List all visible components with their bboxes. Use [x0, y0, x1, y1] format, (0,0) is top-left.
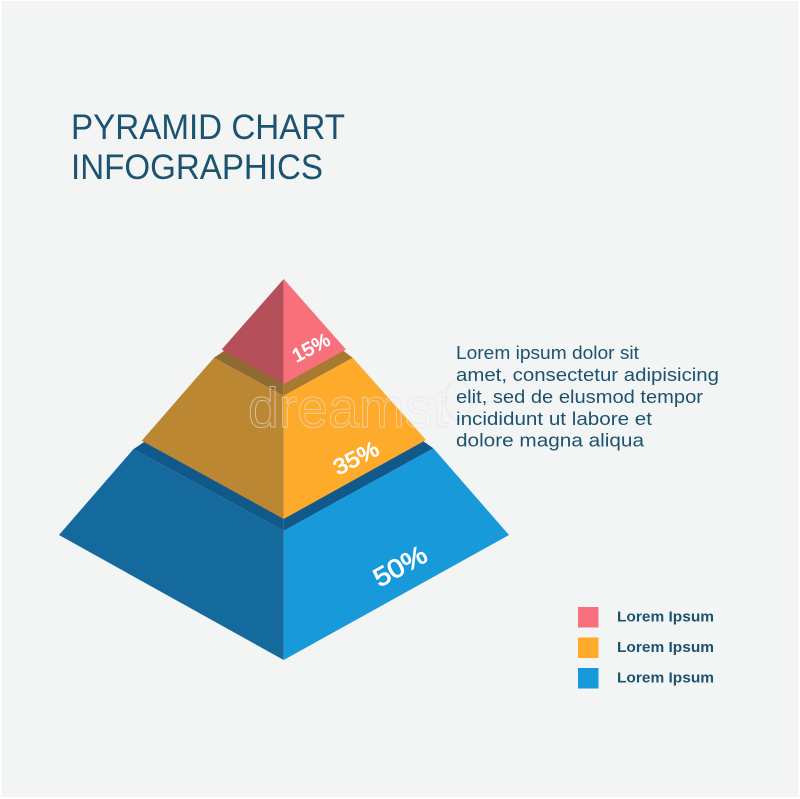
legend item: blue: Lorem Ipsum — [617, 670, 714, 686]
description text: dolore magna aliqua — [456, 430, 645, 450]
label: 50%: 50% — [368, 539, 432, 593]
title: PYRAMID CHART — [71, 108, 345, 147]
legend — [578, 607, 714, 688]
top tier: red 15% — [222, 279, 346, 384]
middle tier: orange 35% — [142, 350, 426, 519]
bottom tier: blue 50% — [59, 441, 509, 660]
description text: amet, consectetur adipisicing — [456, 365, 719, 385]
watermark: dreamst — [248, 376, 448, 439]
legend item: orange: Lorem Ipsum — [617, 639, 714, 656]
title: INFOGRAPHICS — [71, 148, 323, 187]
description text: incididunt ut labore et — [456, 409, 652, 429]
description text: Lorem ipsum dolor sit — [456, 343, 639, 363]
label: 35%: 35% — [329, 436, 383, 480]
label: 15%: 15% — [289, 330, 334, 367]
title — [71, 108, 345, 187]
description text — [456, 343, 719, 450]
legend item: red: Lorem Ipsum — [617, 608, 714, 626]
description text: elit, sed de elusmod tempor — [456, 387, 703, 407]
pyramid chart — [59, 279, 509, 660]
